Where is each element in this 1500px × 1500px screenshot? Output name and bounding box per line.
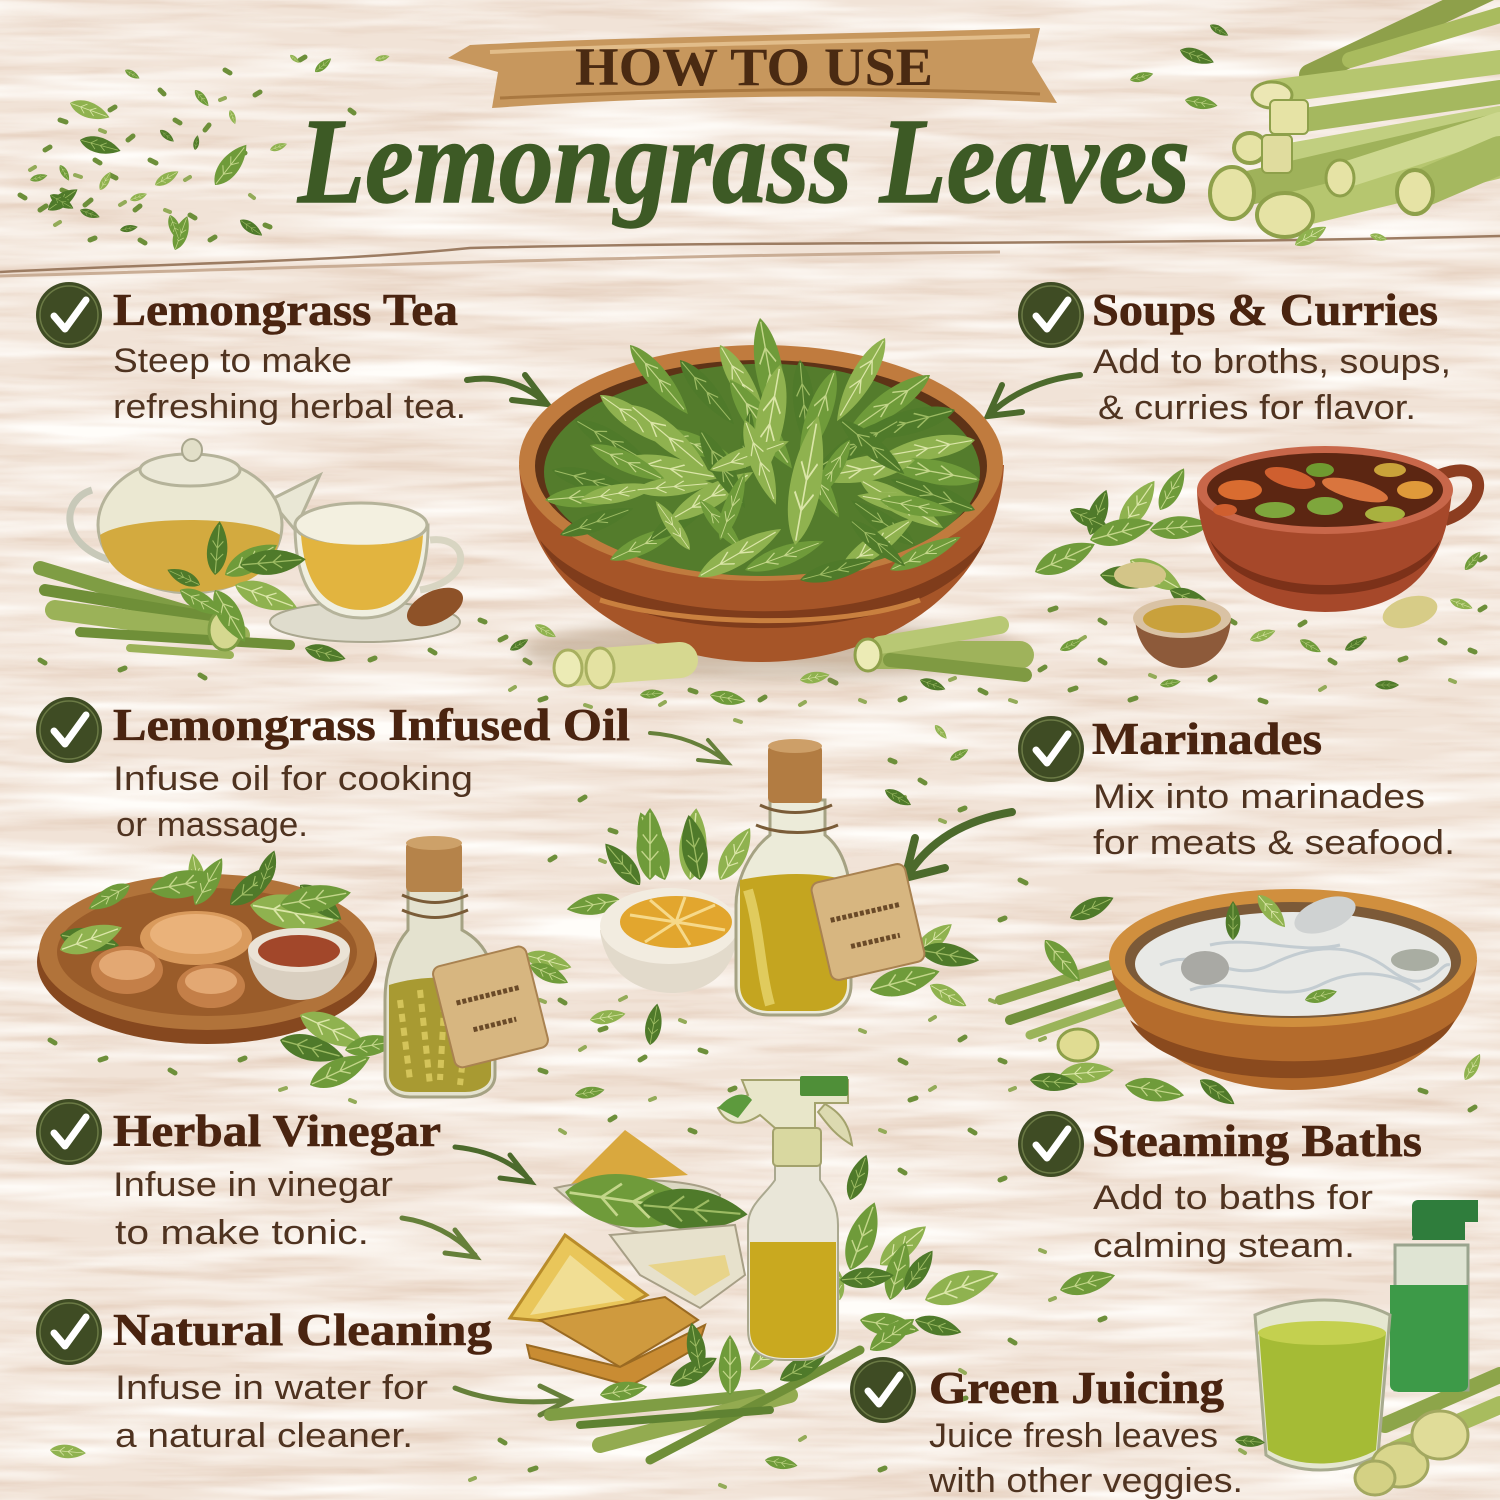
icon: check	[850, 1357, 916, 1423]
description: cleaning: Infuse in water for	[115, 1369, 428, 1407]
banner heading: HOW TO USE	[575, 37, 933, 97]
item: Marinades	[1018, 714, 1455, 862]
description: soups: Add to broths, soups,	[1093, 343, 1451, 381]
icon: check	[1018, 1111, 1084, 1177]
arrow: marinades	[905, 812, 1012, 878]
description: marinades	[1093, 778, 1455, 862]
description: cleaning: a natural cleaner.	[115, 1417, 413, 1455]
item: Lemongrass Tea	[36, 282, 466, 426]
item: Natural Cleaning	[36, 1299, 493, 1455]
illustration: small oil bottle with tag	[277, 836, 574, 1097]
description: vinegar: Infuse in vinegar	[113, 1166, 393, 1204]
heading: Lemongrass Tea: Lemongrass Tea	[113, 285, 458, 335]
description: baths: Add to baths for	[1093, 1179, 1373, 1217]
illustration: green juice glass and bottle	[49, 1200, 1500, 1495]
icon: check	[36, 697, 102, 763]
small dish	[1133, 598, 1231, 668]
heading: Soups & Curries: Soups & Curries	[1092, 285, 1438, 335]
icon: check	[36, 1299, 102, 1365]
banner	[448, 28, 1057, 108]
description: marinades: Mix into marinades	[1093, 778, 1425, 816]
description: oil	[113, 760, 473, 844]
spray bottle	[718, 1076, 852, 1360]
item: Herbal Vinegar	[36, 1099, 441, 1252]
illustration: lemon slices, tray and spray bottle	[510, 1076, 1003, 1460]
heading: Green Juicing: Green Juicing	[929, 1363, 1225, 1413]
lemongrass bundle: top right	[1129, 0, 1500, 251]
icon: check	[1018, 282, 1084, 348]
illustration: central bowl of leaves	[519, 316, 1020, 680]
description: juicing: Juice fresh leaves	[929, 1417, 1218, 1455]
item: Lemongrass Infused Oil	[36, 697, 630, 844]
description: baths	[1093, 1179, 1373, 1265]
title: Lemongrass Leaves	[297, 94, 1190, 229]
illustration: marinade bowl	[1000, 889, 1485, 1111]
heading: Natural Cleaning: Natural Cleaning	[113, 1305, 493, 1355]
illustration: large oil bottle with tag	[736, 723, 981, 1015]
icon: check	[36, 282, 102, 348]
description: juicing: with other veggies.	[928, 1462, 1243, 1500]
heading: Lemongrass Infused Oil: Lemongrass Infused Oil	[113, 700, 630, 750]
item: Soups & Curries	[1018, 282, 1451, 427]
description: vinegar: to make tonic.	[115, 1214, 369, 1252]
arrow: oil	[650, 733, 728, 763]
description: baths: calming steam.	[1093, 1227, 1355, 1265]
description: tea	[113, 342, 466, 426]
description: tea: refreshing herbal tea.	[113, 388, 466, 426]
illustration: cut stalks below bowl	[508, 621, 1084, 708]
description: soups: & curries for flavor.	[1098, 389, 1416, 427]
illustration: teapot and tea cup	[40, 439, 469, 666]
illustration: orange bowl and leaves	[527, 807, 760, 1101]
arrow: tea to bowl	[467, 375, 547, 404]
heading: Marinades: Marinades	[1092, 714, 1322, 764]
item: Steaming Baths	[1018, 1111, 1422, 1265]
icon: check	[36, 1099, 102, 1165]
description: juicing	[928, 1417, 1243, 1500]
arrow: vinegar	[455, 1147, 531, 1182]
arrow: cleaner	[455, 1386, 569, 1415]
arrow: soups to bowl	[988, 375, 1080, 416]
description: oil: Infuse oil for cooking	[113, 760, 473, 798]
description: vinegar	[113, 1166, 393, 1252]
item: Green Juicing	[850, 1357, 1243, 1500]
scattered leaves: top left	[29, 53, 390, 252]
illustration: soup pot	[1030, 446, 1484, 690]
description: tea: Steep to make	[113, 342, 352, 380]
illustration: plate of fritters	[37, 848, 377, 1044]
heading: Steaming Baths: Steaming Baths	[1092, 1116, 1422, 1166]
description: marinades: for meats & seafood.	[1093, 824, 1455, 862]
icon: check	[1018, 716, 1084, 782]
heading: Herbal Vinegar: Herbal Vinegar	[113, 1106, 441, 1156]
arrow: tonic	[402, 1218, 476, 1257]
description: soups	[1093, 343, 1451, 427]
description: oil: or massage.	[116, 806, 308, 844]
description: cleaning	[115, 1369, 428, 1455]
